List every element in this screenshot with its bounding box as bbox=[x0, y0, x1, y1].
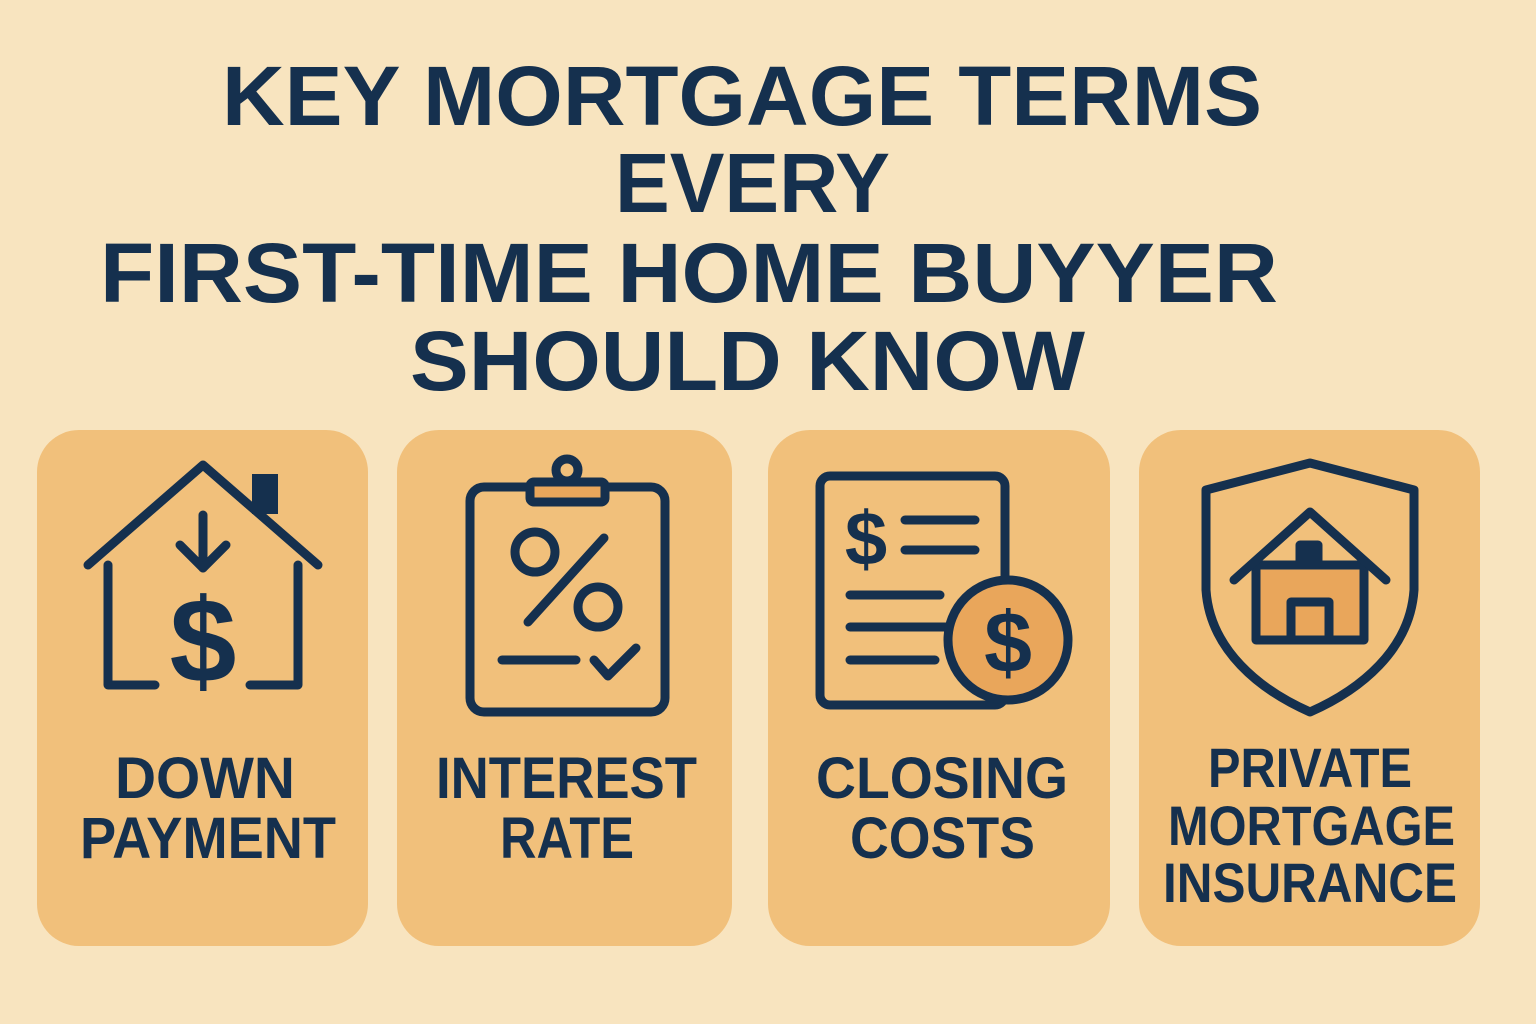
panel: private mortgage insurance bbox=[1139, 430, 1480, 946]
icon: house with dollar: $ bbox=[170, 574, 236, 708]
panel: down payment bbox=[37, 430, 368, 946]
label: closing costs bbox=[816, 746, 1068, 871]
label: private mortgage insurance: PRIVATE bbox=[1208, 736, 1412, 799]
label: down payment: PAYMENT bbox=[80, 806, 336, 871]
title: KEY MORTGAGE TERMS bbox=[222, 49, 1262, 143]
title: SHOULD KNOW bbox=[410, 314, 1086, 408]
title: FIRST-TIME HOME BUYYER bbox=[100, 226, 1278, 320]
title bbox=[100, 49, 1278, 408]
icon: shield with house bbox=[1206, 463, 1414, 712]
label: down payment: DOWN bbox=[115, 746, 295, 811]
panel: interest rate bbox=[397, 430, 732, 946]
label: interest rate: INTEREST bbox=[436, 746, 697, 811]
panel: closing costs bbox=[768, 430, 1110, 946]
label: closing costs: CLOSING bbox=[816, 746, 1068, 811]
label: private mortgage insurance bbox=[1163, 736, 1457, 914]
label: interest rate bbox=[436, 746, 697, 871]
icon: house with dollar bbox=[88, 465, 318, 708]
label: down payment bbox=[80, 746, 336, 871]
icon: document with coin: $ bbox=[845, 497, 887, 582]
icon: document with coin: $ bbox=[984, 595, 1032, 691]
title: EVERY bbox=[615, 136, 890, 230]
label: interest rate: RATE bbox=[500, 806, 634, 871]
icon: clipboard percent bbox=[470, 459, 665, 712]
label: private mortgage insurance: MORTGAGE bbox=[1168, 794, 1455, 857]
label: private mortgage insurance: INSURANCE bbox=[1163, 851, 1457, 914]
icon: document with coin bbox=[820, 476, 1068, 705]
label: closing costs: COSTS bbox=[850, 806, 1035, 871]
